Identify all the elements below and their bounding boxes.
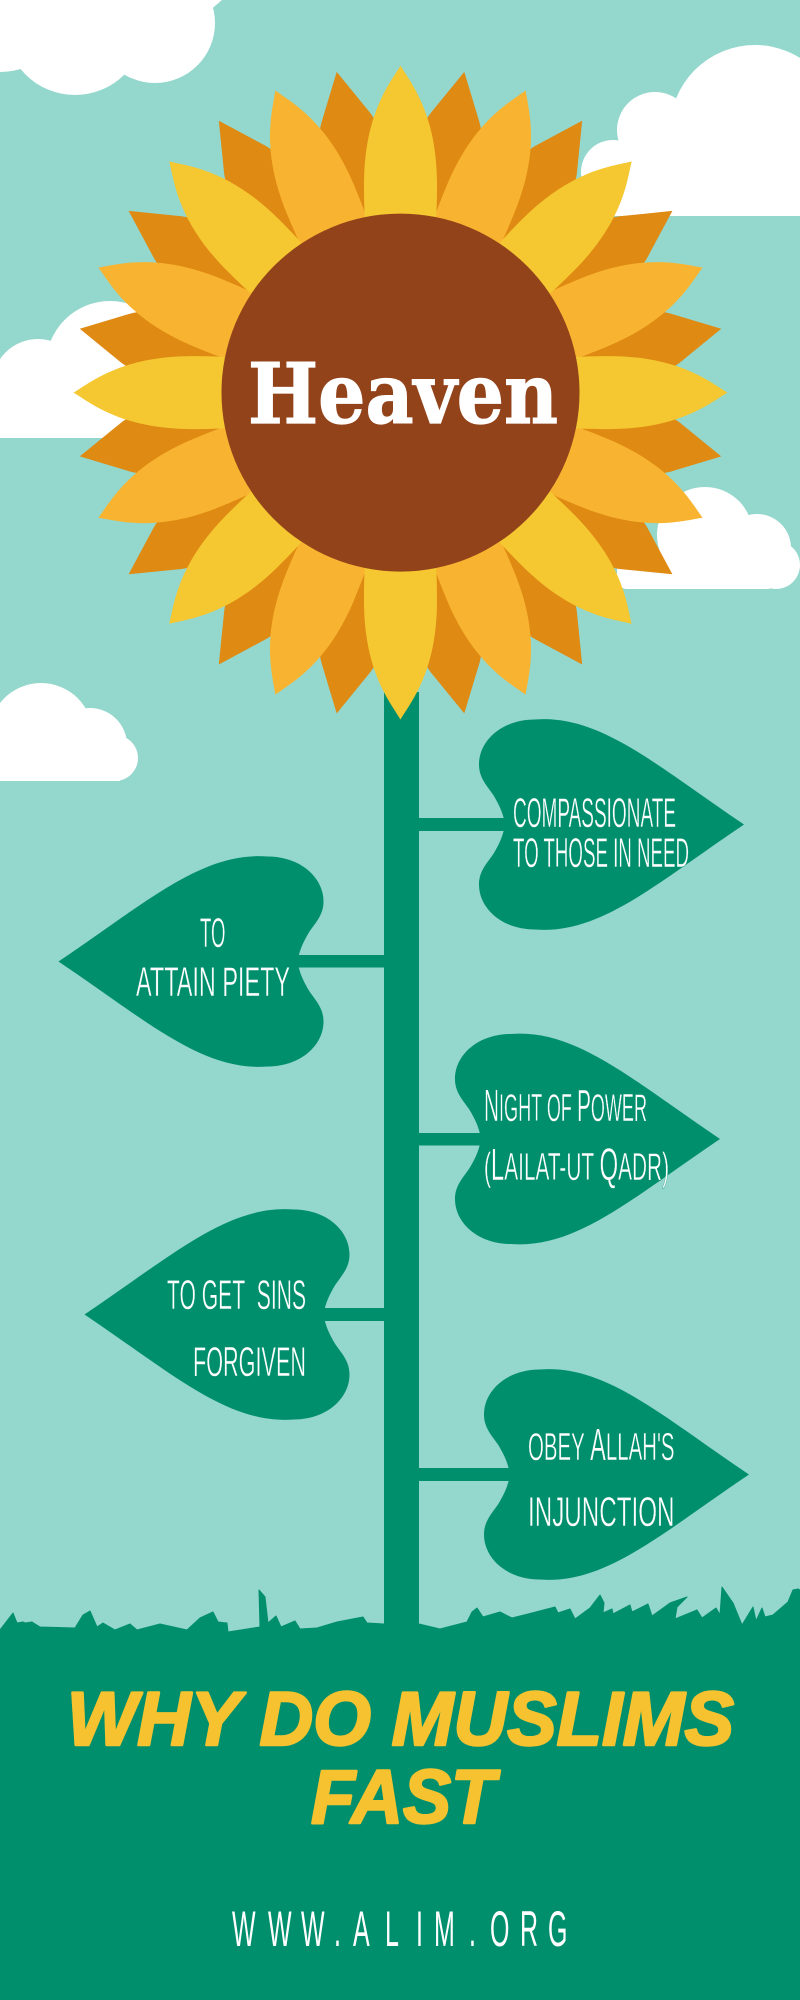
cloud: lower left (0, 683, 138, 787)
leaf: obey Allah's injunction: OBEY ALLAH'S (528, 1419, 674, 1470)
website url: WWW.ALIM.ORG (232, 1902, 567, 1957)
title: FAST (311, 1755, 500, 1840)
cloud: middle right (617, 487, 800, 589)
stem with branches (295, 692, 514, 1642)
leaf: to get sins forgiven: TO GET SINS (167, 1271, 306, 1318)
title: WHY DO MUSLIMS (67, 1677, 734, 1762)
leaf: obey Allah's injunction: INJUNCTION (528, 1488, 674, 1535)
leaf: night of power: NIGHT OF POWER (484, 1080, 647, 1131)
leaf: to get sins forgiven (84, 1209, 350, 1420)
petals: dark orange layer (73, 65, 728, 720)
heading: Heaven: Heaven (248, 345, 558, 443)
leaf: to attain piety: TO (200, 909, 226, 956)
clouds (0, 0, 800, 787)
cloud: middle left (0, 301, 200, 438)
petals: mid orange layer (84, 77, 717, 709)
leaf: night of power (455, 1034, 720, 1244)
cloud: top right (581, 45, 800, 216)
leaf: to attain piety (58, 856, 324, 1067)
leaf: to attain piety: ATTAIN PIETY (136, 958, 290, 1005)
title (67, 1677, 734, 1840)
flower centre (222, 214, 580, 572)
grass ground (0, 1587, 800, 2000)
petals: yellow layer (74, 66, 728, 720)
leaf: obey Allah's injunction (484, 1369, 749, 1580)
sunflower (73, 65, 728, 720)
cloud: top left (0, 0, 222, 95)
leaf: night of power: (LAILAT-UT QADR) (484, 1139, 669, 1190)
leaf: to get sins forgiven: FORGIVEN (193, 1338, 306, 1385)
leaf: compassionate (479, 719, 744, 930)
